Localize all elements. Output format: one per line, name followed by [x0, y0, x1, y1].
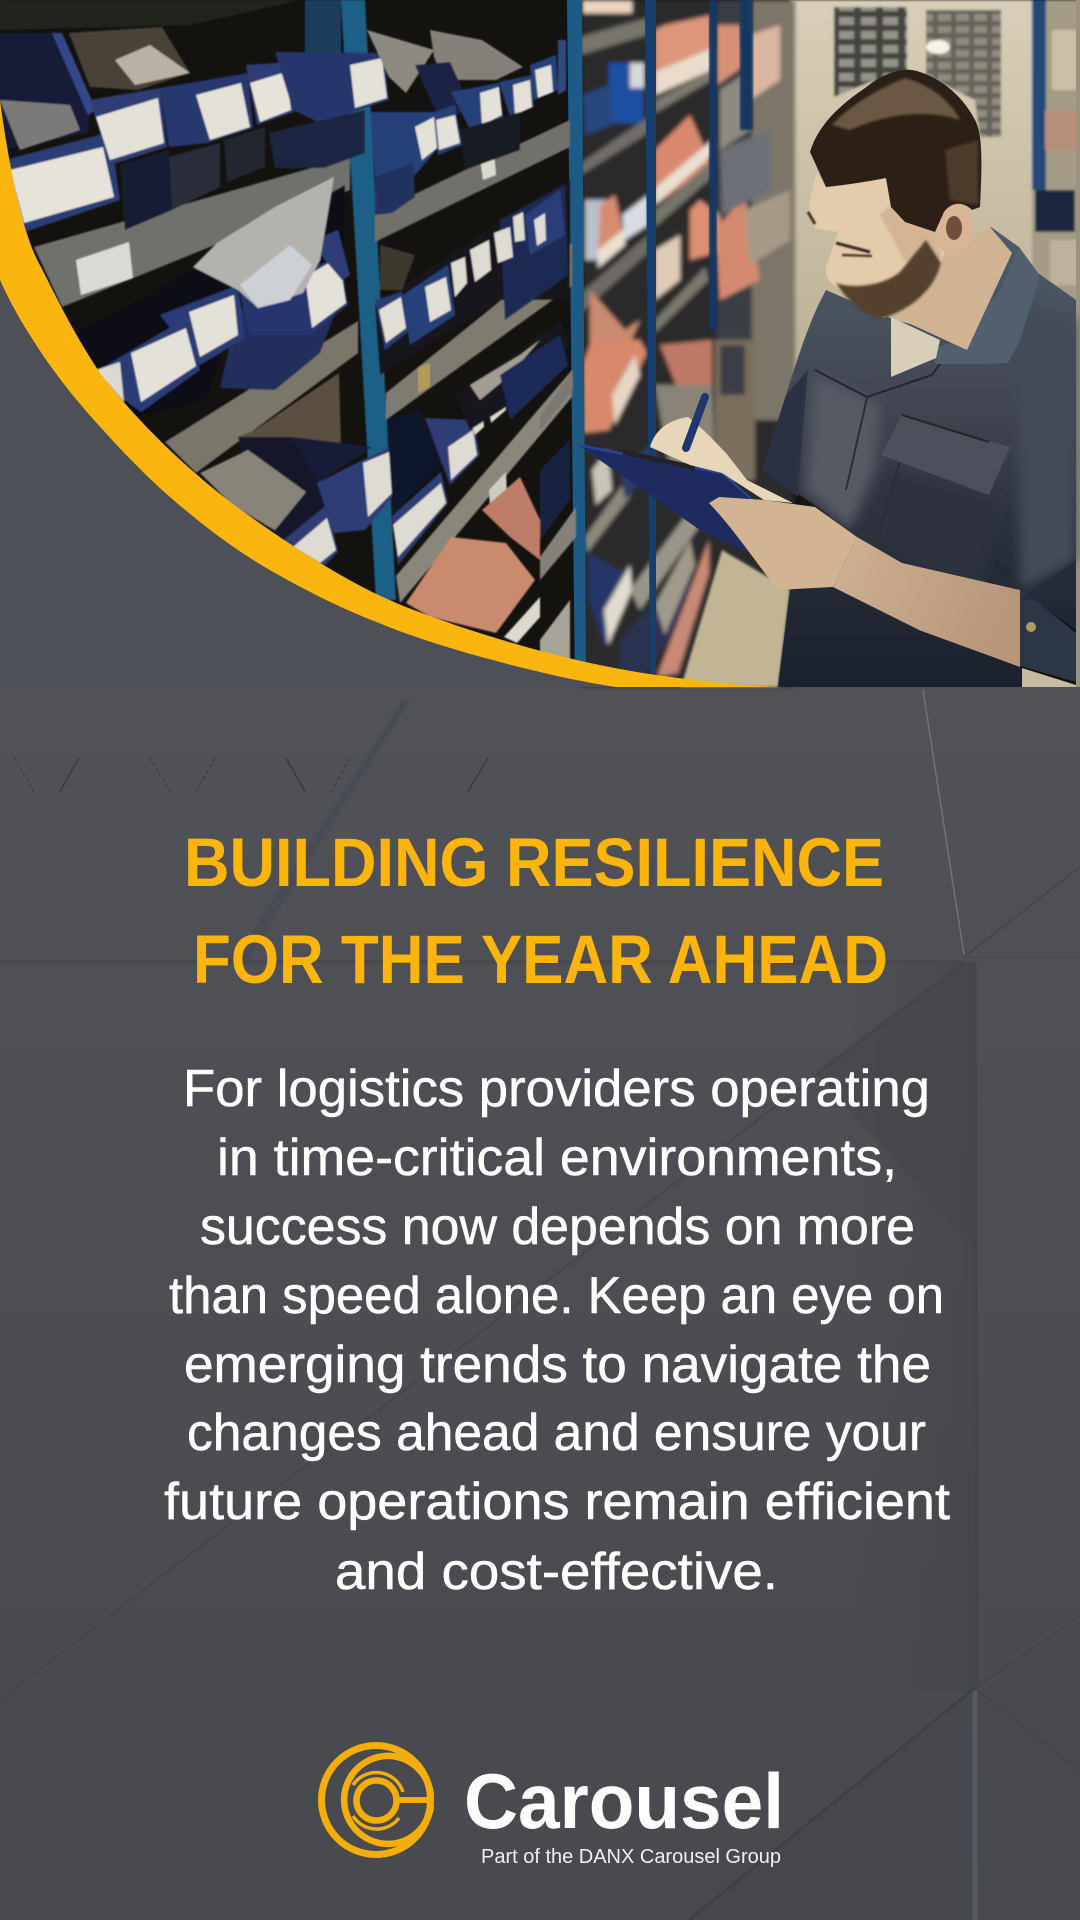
body text: [164, 1060, 951, 1601]
hair: [810, 70, 981, 232]
body text: success now depends on more: [200, 1198, 915, 1256]
body text: in time-critical environments,: [217, 1129, 897, 1187]
holding hand: [709, 497, 857, 590]
back wall and wall racks: [790, 0, 1080, 420]
t-shirt: [891, 317, 940, 377]
wordmark: Carousel: [464, 1757, 784, 1845]
blue shelf uprights: [567, 0, 753, 687]
body text: and cost-effective.: [335, 1543, 778, 1601]
title: FOR THE YEAR AHEAD: [193, 921, 888, 998]
icon: concentric C mark: [322, 1746, 431, 1854]
yellow curved band: [0, 100, 781, 687]
beard: [836, 240, 941, 318]
ear: [933, 199, 973, 255]
pen: [686, 397, 705, 448]
foreground shelves and bins: [0, 0, 576, 680]
logo: Carousel: [322, 1746, 784, 1868]
warehouse photo: [0, 0, 1080, 687]
eye and brow: [808, 212, 872, 256]
grey curved panel: [0, 280, 616, 687]
writing hand: [650, 417, 793, 503]
forearm: [833, 537, 1020, 667]
body text: For logistics providers operating: [183, 1060, 930, 1118]
title: BUILDING RESILIENCE: [184, 824, 884, 901]
tagline: Part of the DANX Carousel Group: [481, 1846, 781, 1868]
neck and face: [809, 173, 1012, 350]
middle shelving: [580, 0, 795, 687]
clipboard: [578, 445, 781, 553]
title: [184, 824, 888, 998]
jacket: [762, 227, 1076, 687]
body text: than speed alone. Keep an eye on: [169, 1267, 944, 1325]
body text: future operations remain efficient: [164, 1473, 951, 1531]
body text: changes ahead and ensure your: [187, 1404, 926, 1462]
worker: floor, jacket, head, hands and clipboard: [578, 0, 1080, 687]
body text: emerging trends to navigate the: [184, 1336, 931, 1394]
